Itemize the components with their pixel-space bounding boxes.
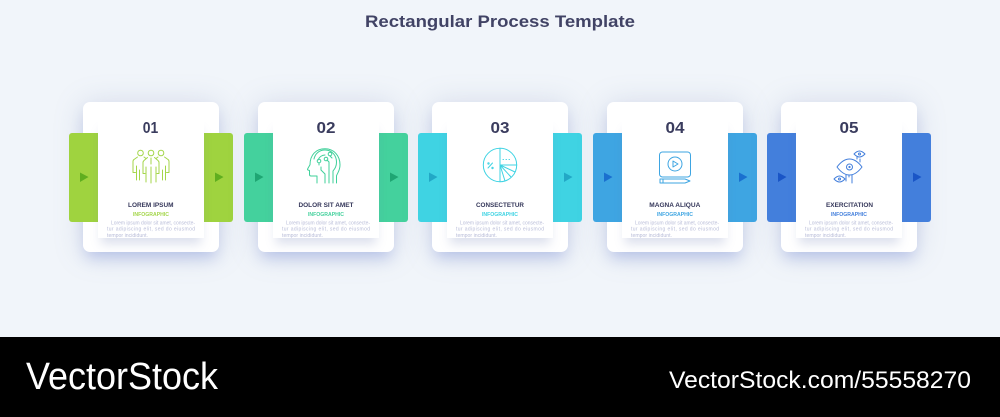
icon: team xyxy=(133,150,169,183)
subtitle: INFOGRAPHIC xyxy=(831,212,867,218)
right tab xyxy=(193,133,233,222)
footer logo: VectorStock xyxy=(26,356,219,398)
left tab xyxy=(244,133,284,222)
back card xyxy=(432,102,568,252)
step 01 content xyxy=(80,120,224,239)
description: tur adipiscing elit, sed do eiusmod xyxy=(282,227,370,233)
left tab xyxy=(593,133,633,222)
number: 03 xyxy=(490,120,510,137)
left arrow xyxy=(604,172,612,182)
left arrow xyxy=(429,172,438,182)
footer url: VectorStock.com/55558270 xyxy=(669,367,971,394)
right tab xyxy=(717,133,757,222)
front card xyxy=(447,118,553,238)
description: tempor incididunt. xyxy=(456,233,497,239)
front card xyxy=(796,118,902,238)
description: Lorem ipsum dolor sit amet, consecte- xyxy=(460,220,544,226)
step 05 content xyxy=(778,120,922,239)
right arrow xyxy=(215,172,224,182)
number: 05 xyxy=(840,120,859,137)
description: Lorem ipsum dolor sit amet, consecte- xyxy=(635,220,719,226)
description: Lorem ipsum dolor sit amet, consecte- xyxy=(809,220,893,226)
step 02 content xyxy=(255,120,398,239)
description xyxy=(107,220,195,239)
step 03 content xyxy=(429,120,572,239)
label: DOLOR SIT AMET xyxy=(298,202,353,209)
front card xyxy=(98,118,204,238)
right tab xyxy=(891,133,931,222)
label: EXERCITATION xyxy=(826,202,874,209)
left tab xyxy=(767,133,807,222)
description xyxy=(456,220,544,239)
panel: step 04 xyxy=(593,94,757,268)
title: Rectangular Process Template xyxy=(365,13,635,31)
description: Lorem ipsum dolor sit amet, consecte- xyxy=(286,220,370,226)
panel: step 05 xyxy=(767,94,931,268)
number: 01 xyxy=(143,120,159,137)
label: CONSECTETUR xyxy=(476,202,525,209)
front card xyxy=(272,118,378,238)
description xyxy=(631,220,719,239)
right arrow xyxy=(390,172,398,182)
right arrow xyxy=(739,172,747,182)
number: 02 xyxy=(316,120,335,137)
footer bar xyxy=(0,337,1000,417)
back card xyxy=(258,102,394,252)
description: tur adipiscing elit, sed do eiusmod xyxy=(631,227,719,233)
number: 04 xyxy=(665,120,685,137)
label: LOREM IPSUM xyxy=(128,202,174,209)
panel: step 03 xyxy=(418,94,582,268)
right tab xyxy=(542,133,582,222)
panel: step 02 xyxy=(244,94,408,268)
left arrow xyxy=(80,172,88,182)
back card xyxy=(83,102,219,252)
right arrow xyxy=(913,172,922,182)
subtitle: INFOGRAPHIC xyxy=(308,212,344,218)
icon: head with circuits xyxy=(307,149,340,183)
right arrow xyxy=(564,172,572,182)
subtitle: INFOGRAPHIC xyxy=(133,212,169,218)
description: Lorem ipsum dolor sit amet, consecte- xyxy=(111,220,195,226)
label: MAGNA ALIQUA xyxy=(649,202,701,209)
left tab xyxy=(418,133,458,222)
icon: eyes xyxy=(834,151,865,183)
panel: step 01 xyxy=(69,94,233,268)
description xyxy=(282,220,370,239)
back card xyxy=(781,102,917,252)
description: tur adipiscing elit, sed do eiusmod xyxy=(456,227,544,233)
description: tempor incididunt. xyxy=(631,233,672,239)
step 04 content xyxy=(604,120,748,239)
icon: video player and pencil xyxy=(659,152,690,183)
description: tempor incididunt. xyxy=(805,233,846,239)
front card xyxy=(622,118,728,238)
left arrow xyxy=(254,172,263,182)
left arrow xyxy=(778,172,786,182)
description: tur adipiscing elit, sed do eiusmod xyxy=(107,227,195,233)
subtitle: INFOGRAPHIC xyxy=(482,212,518,218)
description: tur adipiscing elit, sed do eiusmod xyxy=(805,227,893,233)
left tab xyxy=(69,133,109,222)
description: tempor incididunt. xyxy=(107,233,148,239)
back card xyxy=(607,102,743,252)
subtitle: INFOGRAPHIC xyxy=(657,212,693,218)
icon: pie chart xyxy=(483,148,517,182)
description xyxy=(805,220,893,239)
description: tempor incididunt. xyxy=(282,233,322,239)
right tab xyxy=(368,133,408,222)
